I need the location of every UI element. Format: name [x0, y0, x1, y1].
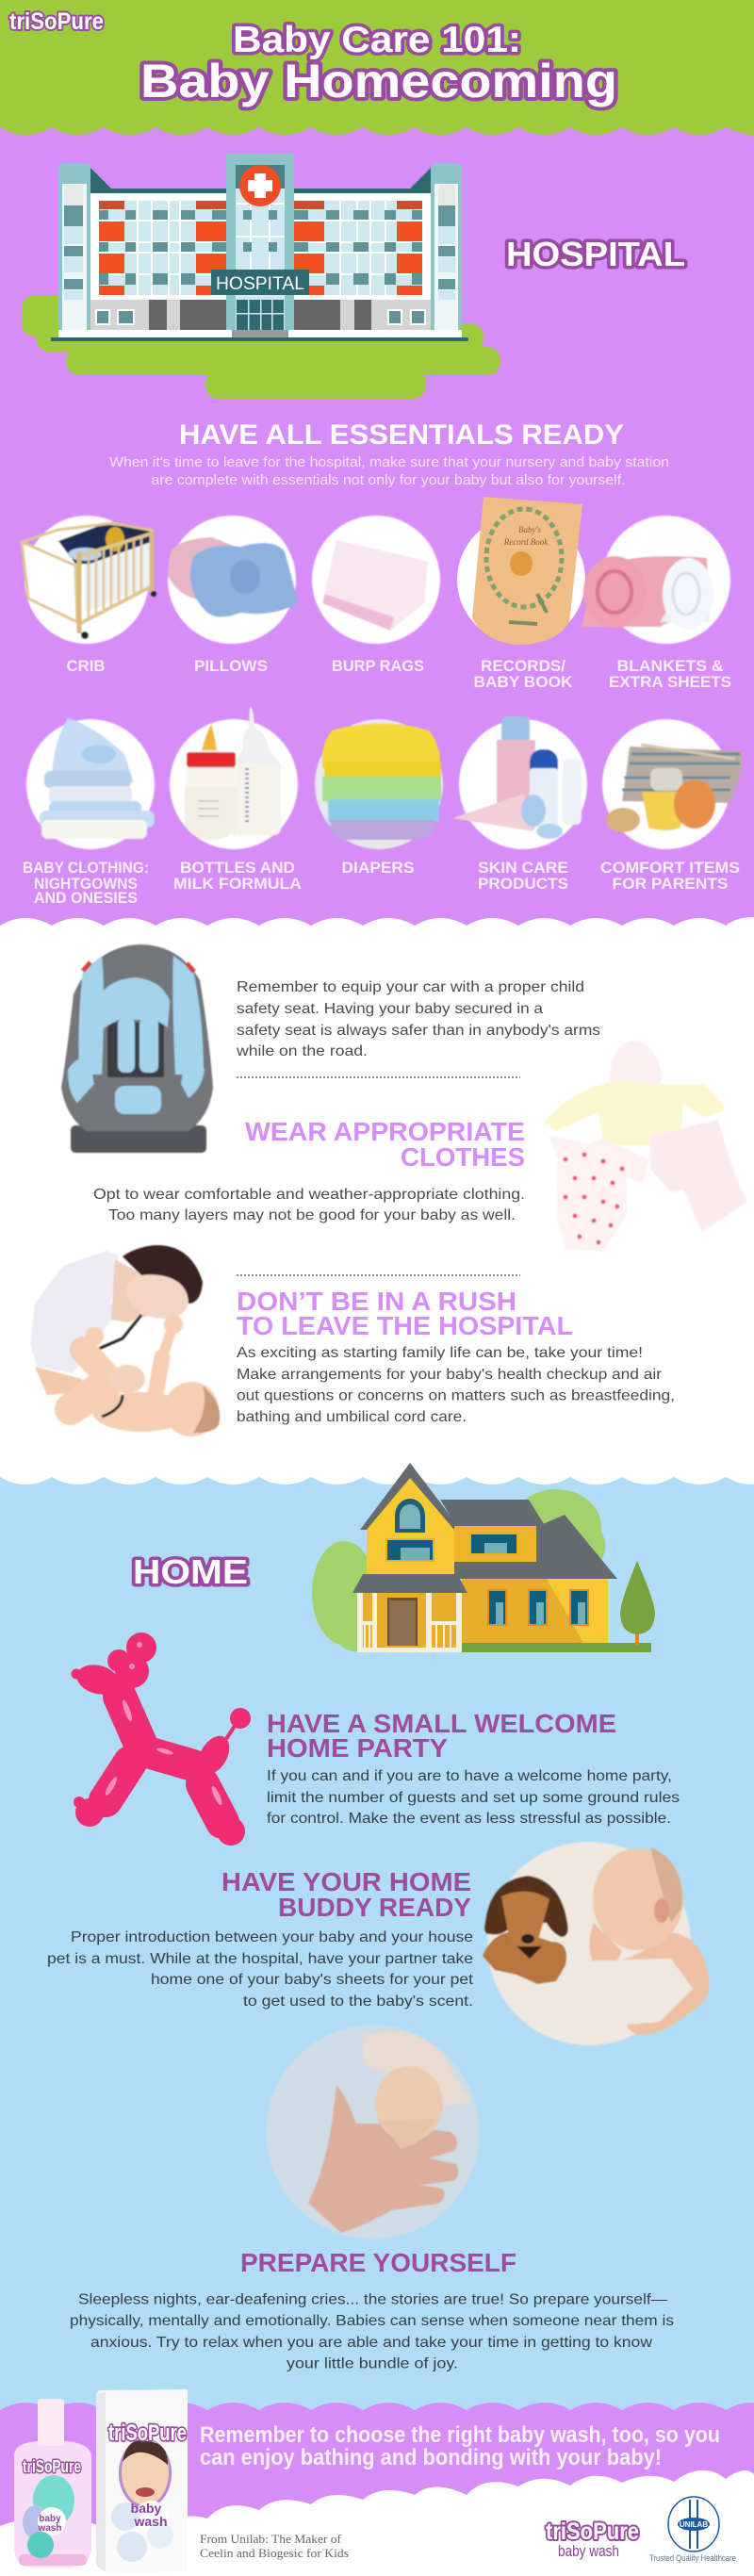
label: baby clothing: BABY CLOTHING: [23, 859, 149, 877]
label: baby clothing [23, 859, 149, 907]
label: skin care products: PRODUCTS [478, 875, 568, 893]
icon: green lawn behind hospital [22, 295, 500, 399]
text block: prepare yourself: anxious. Try to relax when you are able and take your time in getting to know [90, 2335, 652, 2351]
icon: hospital building [51, 154, 468, 341]
text block: home buddy: pet is a must. While at the hospital, have your partner take [47, 1951, 473, 1967]
logo: Unilab: UNILAB [680, 2520, 708, 2529]
icon: balloon dog [72, 1633, 251, 1846]
text block: clothes: Opt to wear comfortable and weather-appropriate clothing. [93, 1187, 525, 1203]
label: pillows: PILLOWS [194, 657, 268, 675]
heading: wear appropriate clothes: CLOTHES [401, 1142, 525, 1172]
icon: baby clothes [545, 1041, 747, 1251]
text block: welcome home party [267, 1768, 680, 1827]
text block: car seat: while on the road. [236, 1043, 368, 1059]
label: records baby book: BABY BOOK [473, 673, 573, 691]
icon: house [312, 1463, 655, 1652]
heading: home buddy ready: HAVE YOUR HOME [221, 1867, 471, 1896]
icon: baby wash bottle: triSoPure [23, 2457, 81, 2476]
label: crib: CRIB [66, 657, 106, 675]
item: baby clothing [26, 718, 155, 849]
text block: baby wash reminder [200, 2422, 720, 2470]
item: records baby book: Record Book [503, 537, 549, 547]
heading: small welcome home party: HAVE A SMALL WELCOME [267, 1709, 616, 1738]
logo: triSoPure baby wash: triSoPure [546, 2519, 639, 2545]
label: skin care products: SKIN CARE [478, 859, 568, 877]
text block: home buddy: to get used to the baby's scent. [243, 1994, 473, 2010]
text block: car seat: safety seat is always safer than in anybody's arms [237, 1023, 600, 1039]
item: blankets [582, 516, 730, 644]
panel: green title banner [0, 0, 754, 137]
panel: hospital section background [0, 123, 754, 926]
item: bottles and milk formula [170, 707, 298, 849]
icon: baby wash box: baby [131, 2501, 162, 2516]
title: Baby Homecoming [140, 55, 617, 107]
heading: home buddy ready [221, 1867, 471, 1922]
logo: triSoPure baby wash [546, 2519, 639, 2560]
icon: baby wash box: triSoPure [108, 2420, 187, 2446]
icon: adult hand holding baby hand [266, 2025, 479, 2240]
logo: triSoPure: triSoPure [9, 8, 104, 35]
text block: essentials intro: When it's time to leave for the hospital, make sure that your nursery and baby station [109, 454, 669, 470]
icon: baby wash bottle [14, 2399, 91, 2568]
label: comfort items for parents: FOR PARENTS [613, 875, 728, 893]
text block: hospital stay: Make arrangements for your baby's health checkup and air [237, 1367, 663, 1383]
text block: prepare yourself [70, 2292, 674, 2371]
item: pillows [168, 516, 298, 644]
heading: don't be in a rush: TO LEAVE THE HOSPITAL [237, 1311, 573, 1340]
icon: baby wash box: wash [133, 2514, 168, 2529]
heading: don't be in a rush: DON’T BE IN A RUSH [237, 1287, 516, 1316]
label: bottles and milk formula: BOTTLES AND [180, 859, 295, 877]
text block: hospital stay: out questions or concerns on matters such as breastfeeding, [237, 1387, 675, 1404]
heading: wear appropriate clothes: WEAR APPROPRIATE [245, 1117, 525, 1146]
item: records baby book: Baby's [518, 525, 541, 534]
icon: car seat [61, 944, 213, 1153]
label: burp rags: BURP RAGS [332, 657, 424, 675]
label: baby clothing: AND ONESIES [34, 889, 138, 907]
text block: car seat [236, 979, 600, 1059]
label: comfort items for parents [600, 859, 740, 893]
item: burp rags [312, 516, 440, 644]
panel: home section background [0, 1477, 754, 2451]
text block: welcome home party: for control. Make the event as less stressful as possible. [267, 1811, 671, 1827]
heading: home buddy ready: BUDDY READY [278, 1893, 471, 1922]
text block: welcome home party: limit the number of guests and set up some ground rules [267, 1790, 680, 1806]
icon: baby wash bottle: baby [39, 2514, 61, 2524]
text block: car seat: safety seat. Having your baby secured in a [237, 1001, 543, 1017]
label: baby clothing: NIGHTGOWNS [34, 875, 138, 893]
logo: triSoPure baby wash: baby wash [558, 2542, 619, 2560]
label: comfort items for parents: COMFORT ITEMS [600, 859, 740, 877]
text block: baby wash reminder: can enjoy bathing and bonding with your baby! [200, 2445, 662, 2470]
title: Baby Care 101: [233, 20, 521, 60]
heading: hospital: HOSPITAL [506, 235, 685, 273]
heading: wear appropriate clothes [245, 1117, 525, 1172]
text block: clothes: Too many layers may not be good for your baby as well. [108, 1207, 516, 1223]
item: skin care products [452, 716, 587, 849]
label: diapers: DIAPERS [341, 859, 415, 877]
label: bottles and milk formula: MILK FORMULA [173, 875, 302, 893]
icon: baby wash bottle: wash [37, 2523, 62, 2534]
text block: hospital stay: As exciting as starting family life can be, take your time! [237, 1345, 643, 1361]
text block: from unilab: Ceelin and Biogesic for Kids [200, 2546, 349, 2560]
text block: essentials intro: are complete with essentials not only for your baby but also for yourself. [151, 472, 626, 488]
text block: home buddy: Proper introduction between your baby and your house [71, 1929, 473, 1945]
panel: white footer area [0, 2470, 754, 2576]
label: records baby book: RECORDS/ [481, 657, 566, 675]
label: blankets and extra sheets: EXTRA SHEETS [609, 673, 731, 691]
text block: from unilab: From Unilab: The Maker of [200, 2532, 342, 2546]
label: skin care products [478, 859, 568, 893]
text block: prepare yourself: Sleepless nights, ear-deafening cries... the stories are true! So prepare yourself— [78, 2292, 667, 2307]
item: records baby book [457, 497, 585, 645]
label: bottles and milk formula [173, 859, 302, 893]
text block: car seat: Remember to equip your car with a proper child [237, 979, 584, 995]
item: comfort items for parents [602, 719, 743, 849]
text block: prepare yourself: physically, mentally and emotionally. Babies can sense when someone near them is [70, 2313, 674, 2329]
heading: home: HOME [133, 1552, 248, 1591]
text block: hospital stay [237, 1345, 675, 1425]
item: diapers [315, 719, 443, 849]
title [140, 20, 617, 107]
icon: baby wash box [96, 2389, 188, 2573]
icon: doctor with baby [30, 1245, 220, 1436]
heading: have all essentials ready: HAVE ALL ESSENTIALS READY [179, 419, 624, 451]
text block: home buddy: home one of your baby's sheets for your pet [151, 1972, 474, 1988]
logo: Unilab: Trusted Quality Healthcare [649, 2553, 736, 2563]
text block: prepare yourself: your little bundle of joy. [287, 2356, 458, 2371]
text block: from unilab [200, 2532, 349, 2560]
label: blankets and extra sheets: BLANKETS & [616, 657, 724, 675]
heading: don't be in a rush [237, 1287, 573, 1340]
panel: purple footer band [0, 2403, 754, 2576]
text block: hospital stay: bathing and umbilical cord care. [237, 1409, 467, 1425]
logo: Unilab [649, 2497, 736, 2563]
icon: puppy and sleeping baby [483, 1842, 709, 2045]
heading: small welcome home party: HOME PARTY [267, 1733, 448, 1763]
text block: welcome home party: If you can and if you are to have a welcome home party, [267, 1768, 672, 1784]
text block: home buddy [47, 1929, 474, 2010]
label: records baby book [473, 657, 573, 691]
item: crib [22, 516, 156, 644]
heading: small welcome home party [267, 1709, 616, 1763]
label: blankets and extra sheets [609, 657, 731, 691]
text block: essentials intro [109, 454, 669, 488]
text block: clothes [93, 1187, 525, 1223]
icon: hospital building: HOSPITAL [216, 274, 304, 294]
heading: prepare yourself: PREPARE YOURSELF [240, 2248, 516, 2277]
